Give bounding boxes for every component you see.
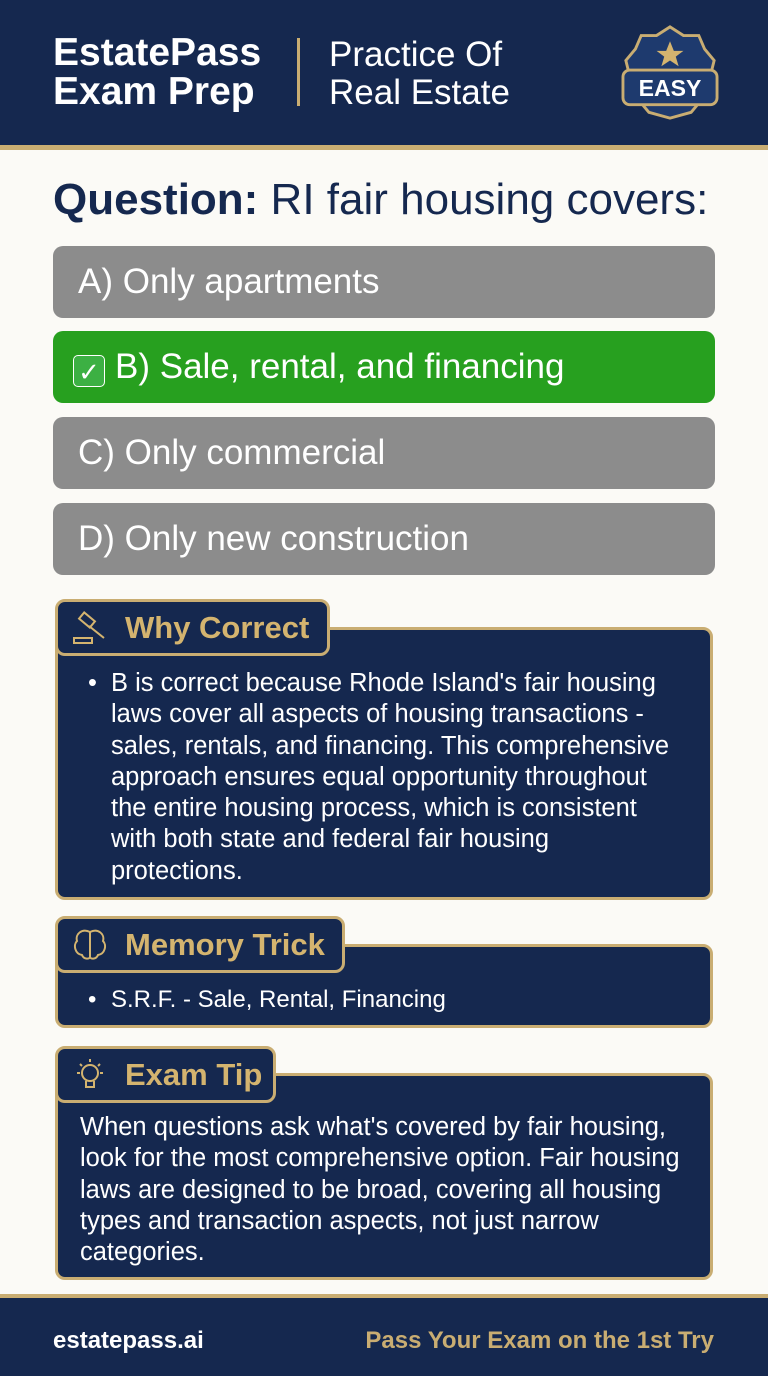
subtitle: Real Estate [329,73,510,112]
option D [53,503,715,575]
option C: C) Only commercial [78,433,385,472]
question: Question: RI fair housing covers: [53,175,708,224]
heading: why correct: Why Correct [125,610,309,645]
panel: why correct: B is correct because Rhode Island's fair housing laws cover all aspects of housing transactions - sales, rentals, and financing. This comprehensive approach ensures equal opportunity throughout the entire housing process, which is consistent with both state and federal fair housing protections. [111,669,669,885]
heading: memory trick: Memory Trick [125,927,325,962]
heading: memory trick [55,916,345,973]
option B correct: B) Sale, rental, and financing [115,347,564,386]
panel: memory trick [55,944,713,1028]
brand title [53,31,261,113]
option D: D) Only new construction [78,519,469,558]
option A [53,246,715,318]
option B correct: ✓ [78,357,100,387]
subtitle [329,35,510,112]
option C [53,417,715,489]
heading: exam tip [55,1046,276,1103]
panel: exam tip: When questions ask what's covered by fair housing, look for the most comprehensive option. Fair housing laws are designed to be broad, covering all housing types and transaction aspects, not just narrow categories. [80,1113,680,1266]
panel: exam tip [55,1073,713,1280]
panel: memory trick: S.R.F. - Sale, Rental, Financing [111,986,446,1013]
icon: lightbulb [77,1059,103,1088]
subtitle: Practice Of [329,35,502,74]
panel: memory trick: • [88,986,96,1013]
brand title: Exam Prep [53,70,255,113]
badge: easy: EASY [639,75,701,101]
footer url: estatepass.ai [53,1327,204,1354]
panel: why correct [55,627,713,900]
panel: why correct: • [88,669,97,697]
divider [297,38,300,106]
footer slogan: Pass Your Exam on the 1st Try [365,1327,714,1354]
icon: brain [74,930,106,960]
brand title: EstatePass [53,31,261,74]
header gold rule [0,145,768,150]
option A: A) Only apartments [78,262,380,301]
heading: exam tip: Exam Tip [125,1057,262,1092]
header [0,0,768,145]
heading: why correct [55,599,330,656]
icon: gavel [73,611,105,644]
option B correct [53,331,715,403]
footer [0,1294,768,1376]
badge: easy [622,25,718,120]
